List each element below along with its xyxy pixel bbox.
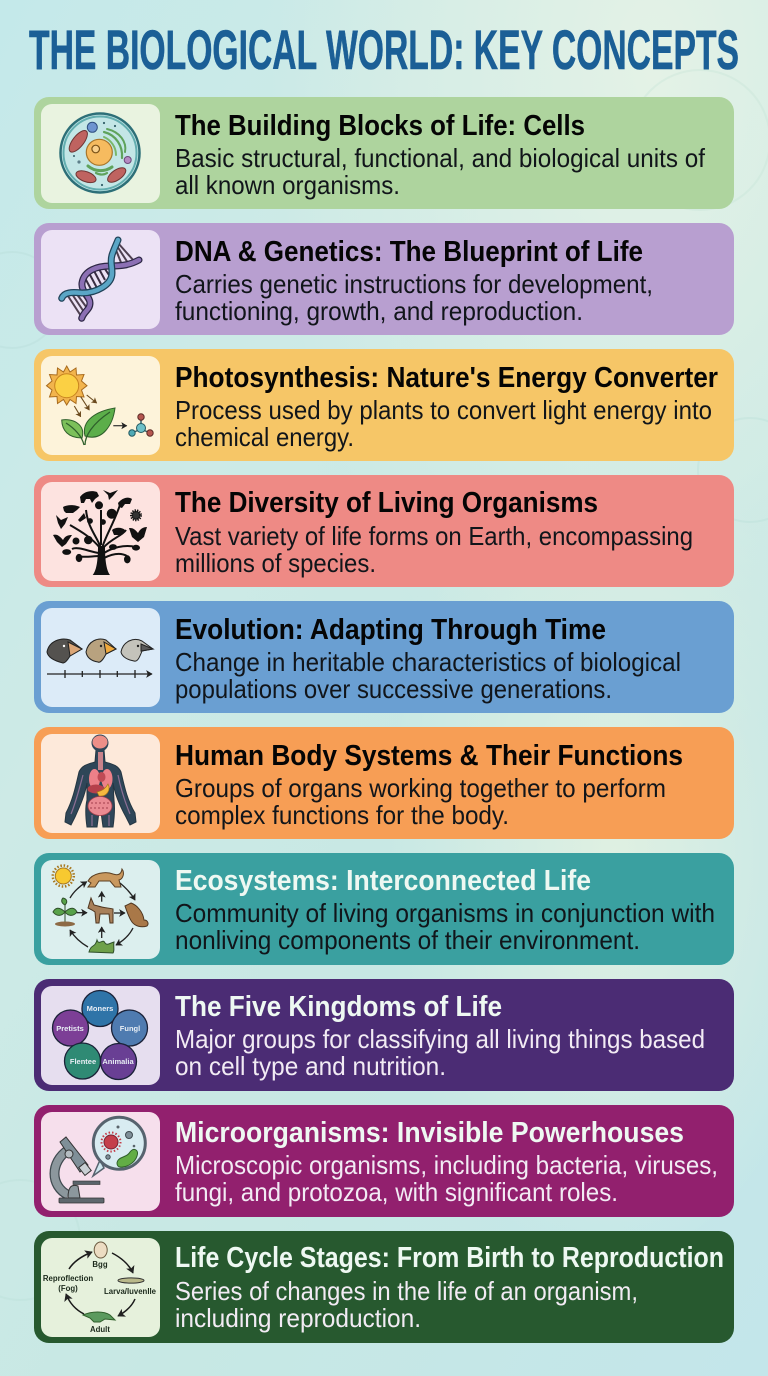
icon: bird beaks on a timeline [47, 639, 153, 678]
body text: on cell type and nutrition. [175, 1051, 446, 1081]
heading: Human Body Systems & Their Functions [175, 740, 683, 772]
body text: Process used by plants to convert light energy into [175, 395, 712, 425]
body text [175, 269, 653, 326]
icon: life cycle diagram: Adult [90, 1325, 110, 1334]
icon: five kingdoms circles: Fungl [120, 1024, 140, 1033]
body text: nonliving components of their environment. [175, 925, 640, 955]
icon: tree of life with silhouettes [53, 490, 147, 575]
heading: Ecosystems: Interconnected Life [175, 865, 591, 897]
icon: life cycle diagram: (Fog) [58, 1284, 78, 1293]
icon: human body organs [65, 734, 136, 827]
icon: life cycle diagram: Reproflection [43, 1274, 93, 1283]
body text: Carries genetic instructions for development, [175, 269, 653, 299]
body text [175, 1276, 638, 1333]
body text [175, 898, 715, 955]
icon: DNA helix [62, 240, 139, 318]
body text: Groups of organs working together to perform [175, 773, 666, 803]
icon: five kingdoms circles: Moners [87, 1004, 113, 1013]
heading: Microorganisms: Invisible Powerhouses [175, 1117, 684, 1149]
icon: life cycle diagram: Bgg [92, 1260, 108, 1269]
body text [175, 395, 712, 452]
body text: functioning, growth, and reproduction. [175, 296, 583, 326]
icon: five kingdoms circles: Pretists [56, 1024, 84, 1033]
panel: photosynthesis [34, 349, 734, 461]
body text: Series of changes in the life of an organism, [175, 1276, 638, 1306]
body text: fungi, and protozoa, with significant roles. [175, 1177, 618, 1207]
body text: Basic structural, functional, and biological units of [175, 143, 706, 173]
icon: life cycle diagram [43, 1242, 157, 1334]
body text [175, 1024, 705, 1081]
body text: all known organisms. [175, 170, 400, 200]
body text [175, 647, 681, 704]
icon: life cycle diagram: Larva/Iuvenlle [104, 1287, 157, 1296]
body text: complex functions for the body. [175, 800, 509, 830]
icon: sun, leaves and molecule [46, 366, 153, 445]
body text: millions of species. [175, 548, 376, 578]
icon: animal cell [60, 114, 140, 192]
body text: chemical energy. [175, 422, 354, 452]
panel: five kingdoms [34, 979, 734, 1091]
body text: including reproduction. [175, 1303, 421, 1333]
panel: diversity [34, 475, 734, 587]
body text: populations over successive generations. [175, 674, 612, 704]
icon: microscope and magnified microbes [54, 1117, 145, 1203]
panel: DNA [34, 223, 734, 335]
icon: five kingdoms circles [52, 990, 148, 1080]
body text [175, 1150, 718, 1207]
icon: five kingdoms circles: Animalia [102, 1057, 134, 1066]
heading: The Building Blocks of Life: Cells [175, 110, 585, 142]
heading: The Five Kingdoms of Life [175, 991, 502, 1023]
panel: evolution [34, 601, 734, 713]
heading: Evolution: Adapting Through Time [175, 614, 606, 646]
panel: microorganisms [34, 1105, 734, 1217]
body text: Change in heritable characteristics of biological [175, 647, 681, 677]
panel: cells [34, 97, 734, 209]
panel: ecosystems [34, 853, 734, 965]
icon: five kingdoms circles: Flentee [70, 1057, 96, 1066]
icon: ecosystem food web [53, 866, 148, 953]
body text: Microscopic organisms, including bacteria, viruses, [175, 1150, 718, 1180]
body text: Vast variety of life forms on Earth, encompassing [175, 521, 693, 551]
heading: Photosynthesis: Nature's Energy Converter [175, 362, 718, 394]
body text: Major groups for classifying all living things based [175, 1024, 705, 1054]
heading: The Diversity of Living Organisms [175, 487, 598, 519]
panel: human body [34, 727, 734, 839]
body text [175, 143, 706, 200]
body text [175, 521, 693, 578]
body text: Community of living organisms in conjunction with [175, 898, 715, 928]
heading: DNA & Genetics: The Blueprint of Life [175, 236, 643, 268]
body text [175, 773, 666, 830]
panel: life cycle [34, 1231, 734, 1343]
